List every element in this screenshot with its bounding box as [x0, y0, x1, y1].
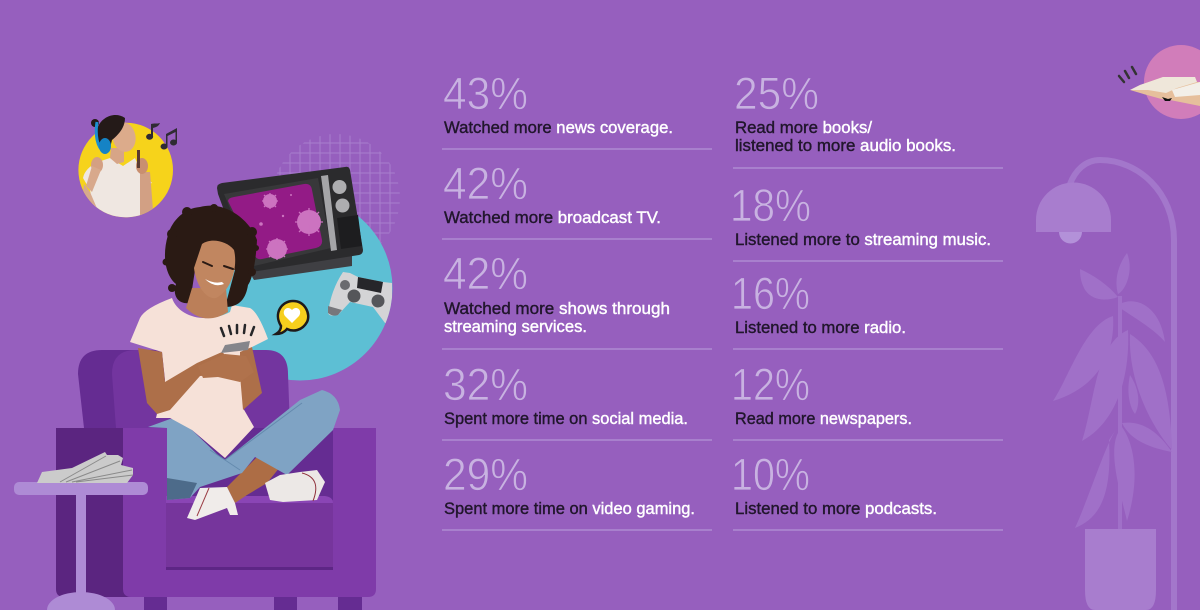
- retro TV: [217, 167, 363, 280]
- stat: 42% broadcast TV: Watched more broadcast TV.: [444, 209, 661, 227]
- stat: 29% video gaming: [442, 449, 712, 530]
- speech bubble with heart: [276, 301, 308, 334]
- stat: 42% streaming services: [442, 248, 712, 349]
- stat: 12% newspapers: [731, 359, 1003, 440]
- stat: 42% streaming services: streaming services.: [444, 318, 587, 336]
- side table with newspaper: [14, 452, 148, 610]
- stat: 18% streaming music: 18%: [730, 180, 811, 231]
- face: [194, 241, 235, 298]
- potted plant: [1053, 253, 1172, 610]
- hands: [198, 354, 254, 382]
- stat: 10% podcasts: Listened to more podcasts.: [735, 500, 937, 518]
- game controller: [328, 272, 392, 325]
- stat: 10% podcasts: [731, 449, 1003, 530]
- stat: 42% broadcast TV: [442, 158, 712, 239]
- stat: 25% books: listened to more audio books.: [735, 137, 956, 155]
- back foot and ankle: [227, 457, 280, 503]
- stat: 12% newspapers: 12%: [731, 359, 810, 410]
- stat: 16% radio: [731, 268, 1003, 349]
- stat: 43% news coverage: 43%: [443, 68, 528, 119]
- stat: 42% streaming services: Watched more shows through: [444, 300, 670, 318]
- stat: 10% podcasts: 10%: [731, 449, 810, 500]
- stat: 42% streaming services: 42%: [443, 248, 528, 299]
- stat: 18% streaming music: Listened more to streaming music.: [735, 231, 991, 249]
- stat: 43% news coverage: Watched more news coverage.: [444, 119, 673, 137]
- stat: 43% news coverage: [442, 68, 712, 149]
- teal circle: [208, 196, 392, 380]
- stat: 16% radio: 16%: [731, 268, 810, 319]
- floor lamp: [1036, 160, 1174, 610]
- phone: [221, 341, 250, 353]
- stat: 12% newspapers: Read more newspapers.: [735, 410, 912, 428]
- stat: 29% video gaming: Spent more time on video gaming.: [444, 500, 695, 518]
- stat: 32% social media: Spent more time on social media.: [444, 410, 688, 428]
- yellow circle: woman with headphones: [78, 115, 173, 222]
- stat: 16% radio: Listened to more radio.: [735, 319, 906, 337]
- stat: 25% books: Read more books/: [735, 119, 872, 137]
- stat: 25% books: 25%: [734, 68, 819, 119]
- jeans: [148, 390, 340, 500]
- right arm: [240, 347, 262, 410]
- stat: 18% streaming music: [730, 180, 1003, 261]
- grid circle: [277, 134, 400, 244]
- front sneaker: [187, 487, 238, 520]
- t-shirt: [130, 298, 268, 458]
- neck: [186, 288, 228, 318]
- music notes: [146, 123, 177, 149]
- stat: 32% social media: [442, 359, 712, 440]
- phone notification ticks: [221, 325, 254, 336]
- left arm: [138, 348, 240, 414]
- woman on phone: [130, 204, 340, 520]
- stat: 25% books: [733, 68, 1003, 168]
- pink circle with book: [1119, 45, 1200, 119]
- armchair: [56, 350, 376, 610]
- hair: [162, 204, 259, 307]
- stat: 29% video gaming: 29%: [443, 449, 528, 500]
- back sneaker: [265, 470, 325, 502]
- stat: 32% social media: 32%: [443, 359, 528, 410]
- stat: 42% broadcast TV: 42%: [443, 158, 528, 209]
